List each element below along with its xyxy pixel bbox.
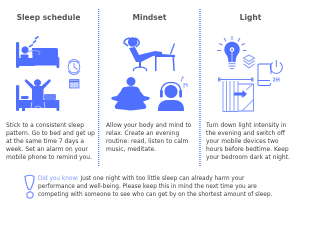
text: sleep schedule	[6, 122, 95, 161]
text: mindset: music, meditate.	[106, 146, 156, 153]
text: light: hours before bedtime. Keep	[206, 146, 289, 153]
heading: sleep schedule: Sleep schedule	[17, 13, 80, 22]
divider left	[98, 9, 100, 167]
text: mindset: relax. Create an evening	[106, 130, 179, 137]
text: mindset	[106, 122, 192, 153]
callout: did you know: competing with someone to see who can get by on the shortest amount of sleep.	[38, 192, 272, 198]
text: sleep schedule: week. Set an alarm on your	[6, 146, 88, 153]
icon: dimming chevrons	[244, 55, 254, 68]
text: light: your bedroom dark at night.	[206, 154, 290, 161]
heading: mindset: Mindset	[133, 13, 166, 22]
text: light: your mobile devices two	[206, 138, 279, 145]
callout: did you know: performance and well-being. Please keep this in mind the next time you are	[38, 184, 257, 190]
icon: person waking in bed	[16, 79, 59, 111]
text: light	[206, 122, 290, 161]
text: sleep schedule: mobile phone to remind you.	[6, 154, 92, 161]
text: sleep schedule: at the same time 7 days a	[6, 138, 84, 145]
icon: person sleeping in bed	[16, 36, 59, 68]
icon: clock and calendar	[68, 60, 80, 88]
icon: phone and power symbol	[258, 60, 282, 86]
text: light: Turn down light intensity in	[206, 122, 286, 129]
callout: did you know: Did you know: Just one night with too little sleep can already harm your	[38, 176, 244, 182]
text: sleep schedule: pattern. Go to bed and get up	[6, 130, 95, 137]
icon: exclamation mark	[25, 175, 34, 198]
icon: person relaxing in chair with desk	[124, 37, 175, 71]
icon: head with headphones and music notes	[158, 77, 187, 111]
divider right	[199, 9, 201, 167]
heading: light: Light	[240, 13, 261, 22]
icon: window with curtain	[218, 78, 254, 112]
icon: person meditating	[111, 77, 150, 110]
callout: did you know	[38, 175, 272, 198]
text: light: the evening and switch off	[206, 130, 285, 137]
text: sleep schedule: Stick to a consistent sleep	[6, 122, 84, 129]
text: mindset: Allow your body and mind to	[106, 122, 191, 129]
text: mindset: routine: read, listen to calm	[106, 138, 188, 145]
icon: light bulb	[217, 36, 246, 68]
label: 2H: 2H	[272, 78, 280, 84]
